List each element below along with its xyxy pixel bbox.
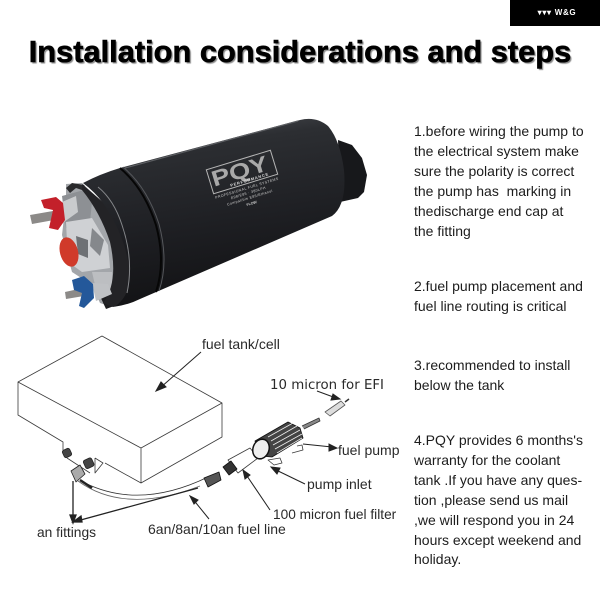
centre port, red xyxy=(56,235,82,269)
step 4 text: tion ,please send us mail xyxy=(414,492,568,508)
step 3 text: below the tank xyxy=(414,377,504,393)
step 3 text xyxy=(414,357,570,393)
arrow: fuel line xyxy=(190,496,209,519)
outlet nut xyxy=(338,140,367,202)
step 4 text xyxy=(414,432,583,567)
title: Installation considerations and steps xyxy=(29,34,571,69)
top terminal, red xyxy=(30,196,78,230)
diagram labels: an fittings xyxy=(37,525,96,540)
fuel tank xyxy=(18,336,222,483)
step 1 text: the fitting xyxy=(414,223,471,239)
100 micron filter xyxy=(223,448,258,475)
step 4 text: holiday. xyxy=(414,551,461,567)
step 4 text: warranty for the coolant xyxy=(414,452,560,468)
step 1 text xyxy=(414,123,584,239)
PQY logo: PQY xyxy=(208,151,271,192)
diagram labels: fuel tank/cell xyxy=(202,336,280,352)
step 2 text: fuel line routing is critical xyxy=(414,298,567,314)
inline fitting xyxy=(204,472,221,487)
PQY logo: FLOW xyxy=(246,200,258,207)
step 1 text: sure the polarity is correct xyxy=(414,163,574,179)
fuel line xyxy=(78,477,208,499)
bottom terminal, blue xyxy=(65,276,112,308)
arrows: an fittings xyxy=(70,481,198,523)
step 2 text: 2.fuel pump placement and xyxy=(414,278,583,294)
step 4 text: 4.PQY provides 6 months's xyxy=(414,432,583,448)
PQY logo: E98/E85 · 380LPH xyxy=(230,186,266,200)
diagram labels: fuel pump xyxy=(338,442,400,458)
arrow: 10 micron xyxy=(317,391,340,400)
PQY logo xyxy=(206,149,284,215)
arrow: pump inlet xyxy=(271,467,305,484)
fuel pump photo xyxy=(30,119,367,309)
installation diagram xyxy=(18,336,349,499)
brand badge: ▾▾▾ W&G xyxy=(538,8,576,17)
step 4 text: tank .If you have any ques- xyxy=(414,472,582,488)
diagram labels: 100 micron fuel filter xyxy=(273,507,397,522)
diagram labels: pump inlet xyxy=(307,476,372,492)
tank fittings xyxy=(62,448,95,482)
step 4 text: ,we will respond you in 24 xyxy=(414,512,574,528)
step 2 text xyxy=(414,278,583,314)
pump outlet fitting xyxy=(302,418,320,429)
illustrated pump xyxy=(250,422,303,465)
arrow: 100 micron xyxy=(243,470,270,510)
arrow: fuel pump xyxy=(303,444,337,451)
step 1 text: the pump has marking in xyxy=(414,183,571,199)
PQY logo: Compatible E85/Ethanol xyxy=(227,189,273,207)
step 3 text: 3.recommended to install xyxy=(414,357,570,373)
dark rim behind body edge xyxy=(82,184,131,307)
diagram labels xyxy=(37,336,400,540)
diagram arrows xyxy=(70,352,340,523)
step 4 text: hours except weekend and xyxy=(414,532,581,548)
brand badge xyxy=(510,0,600,26)
diagram labels: 10 micron for EFI xyxy=(270,378,384,393)
step 1 text: thedischarge end cap at xyxy=(414,203,563,219)
step 1 text: the electrical system make xyxy=(414,143,579,159)
PQY logo: PERFORMANCE xyxy=(230,171,269,188)
body highlights xyxy=(98,121,298,293)
step 1 text: 1.before wiring the pump to xyxy=(414,123,584,139)
arrow: tank xyxy=(156,352,201,391)
connector end xyxy=(62,183,131,309)
diagram labels: 6an/8an/10an fuel line xyxy=(148,521,286,537)
pump body xyxy=(83,119,344,307)
PQY logo: PROFESSIONAL FUEL SYSTEMS xyxy=(215,177,279,200)
10 micron filter xyxy=(325,401,345,416)
